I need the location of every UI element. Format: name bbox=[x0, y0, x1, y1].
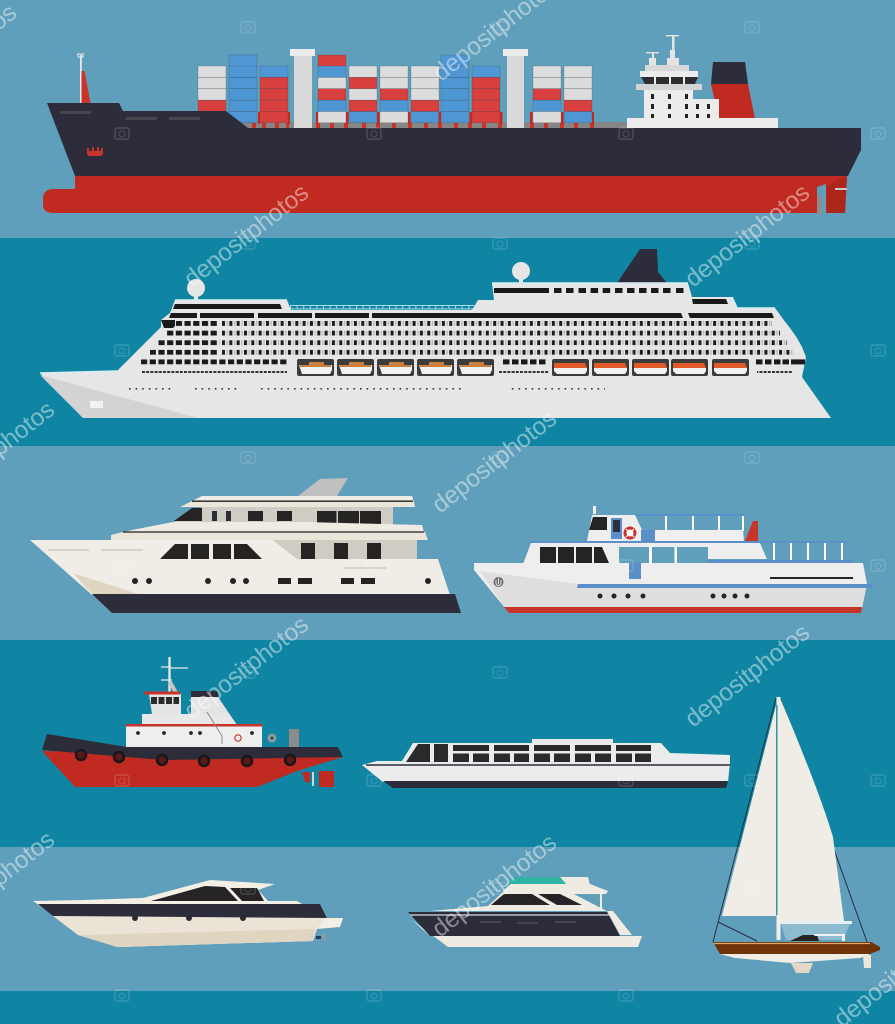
upper cabin bbox=[587, 515, 744, 541]
upper railing bbox=[290, 305, 474, 310]
hull upper bbox=[33, 880, 343, 947]
lower cabin bbox=[273, 540, 417, 559]
rudder and propeller bbox=[302, 771, 334, 787]
main cabin bbox=[126, 726, 262, 748]
hull highlight bbox=[40, 283, 775, 373]
saloon windows bbox=[540, 547, 609, 563]
container ship bbox=[43, 35, 861, 214]
stern bbox=[607, 911, 632, 935]
windows bbox=[491, 894, 582, 905]
upper deck rail bbox=[635, 514, 745, 531]
navy body bbox=[408, 912, 620, 936]
main sail bbox=[780, 698, 844, 921]
mast bbox=[161, 657, 188, 693]
open deck bbox=[613, 547, 677, 564]
sailboat bbox=[713, 697, 880, 973]
crane pillars bbox=[290, 49, 528, 128]
cockpit windows bbox=[151, 886, 264, 901]
orange lifeboats bbox=[552, 359, 749, 376]
radar domes bbox=[187, 262, 530, 301]
brown hull bbox=[713, 942, 880, 954]
saloon windows bbox=[160, 544, 262, 559]
cabin fittings bbox=[136, 731, 254, 741]
container frame posts bbox=[258, 112, 594, 124]
rudder bbox=[863, 955, 871, 968]
white hull bbox=[40, 283, 831, 418]
radar arch bbox=[298, 478, 348, 496]
dodger bbox=[781, 924, 850, 940]
life ring bbox=[625, 528, 635, 538]
waterline stripe bbox=[366, 764, 730, 766]
porthole dots bbox=[129, 388, 605, 390]
superstructure bbox=[627, 35, 778, 128]
lower shade bbox=[78, 929, 315, 947]
fender dots bbox=[132, 915, 246, 921]
ladder bbox=[207, 712, 222, 744]
passenger ferry bbox=[474, 506, 872, 613]
emblem bbox=[494, 577, 504, 587]
white underbody bbox=[720, 954, 870, 963]
blue door bbox=[611, 518, 622, 539]
flybridge rear bbox=[560, 877, 590, 885]
roof bbox=[532, 739, 613, 744]
hull lines bbox=[48, 550, 386, 568]
hull vents bbox=[480, 922, 576, 923]
bow mast bbox=[77, 54, 90, 103]
blue box bbox=[641, 530, 655, 541]
deck lashing band bbox=[228, 122, 628, 128]
funnel bbox=[617, 249, 667, 283]
funnel housing bbox=[191, 697, 237, 725]
navy stripe bbox=[38, 904, 327, 918]
flybridge roof bbox=[503, 884, 608, 894]
upper cabin windows bbox=[174, 508, 381, 525]
funnel bbox=[711, 62, 755, 119]
winch and bollard bbox=[268, 729, 299, 747]
container stacks bbox=[198, 55, 592, 123]
windows bbox=[406, 744, 651, 762]
support post bbox=[600, 894, 602, 910]
crown emblem bbox=[87, 147, 103, 156]
ferry hull bbox=[474, 563, 867, 608]
main hull bbox=[30, 540, 450, 595]
rigging bbox=[713, 698, 867, 942]
navy keel bbox=[383, 781, 728, 788]
mid-ship and stern windows bbox=[503, 359, 805, 364]
portholes bbox=[598, 594, 750, 598]
black trim bbox=[770, 577, 853, 579]
rear railing bbox=[773, 543, 843, 563]
depositphotos watermarks: depositphotos bbox=[427, 405, 562, 519]
lower cabin windows bbox=[301, 543, 381, 559]
jib sail bbox=[722, 705, 776, 916]
depositphotos watermarks: depositphotos bbox=[179, 611, 314, 725]
cabin windows bbox=[141, 321, 793, 373]
motor cruiser bbox=[33, 880, 343, 947]
hull stripe bbox=[714, 942, 870, 944]
tyre fenders bbox=[76, 750, 295, 766]
roof rail bbox=[530, 541, 848, 543]
upper cabin bbox=[174, 507, 393, 526]
luxury yacht bbox=[30, 478, 461, 613]
mid deck bbox=[142, 714, 237, 725]
portholes bbox=[132, 578, 431, 584]
top deck windows bbox=[554, 288, 684, 293]
main deck cabin bbox=[523, 543, 767, 564]
white lifeboats bbox=[297, 359, 494, 376]
rudder bbox=[817, 176, 847, 214]
red fin bbox=[745, 521, 758, 541]
flybridge yacht bbox=[408, 877, 642, 947]
navy gunwale bbox=[42, 734, 343, 760]
mast bbox=[776, 697, 780, 940]
red waterline bbox=[504, 607, 862, 613]
mast bbox=[593, 506, 596, 514]
cruise ship bbox=[40, 249, 831, 418]
bow shade bbox=[40, 375, 198, 418]
cream body bbox=[53, 916, 327, 947]
depositphotos watermarks: depositphotos bbox=[427, 829, 562, 943]
cabin and hull bbox=[362, 743, 730, 782]
red lower hull bbox=[43, 176, 847, 213]
wheelhouse window bbox=[589, 517, 607, 530]
lower hull bbox=[412, 920, 642, 947]
navy waterline bbox=[92, 594, 461, 613]
anchor mark bbox=[90, 401, 103, 408]
propeller bbox=[316, 934, 326, 941]
red hull bbox=[42, 751, 343, 787]
cabin roof stripe bbox=[126, 724, 262, 726]
cabin bbox=[430, 892, 607, 911]
hull shade bbox=[480, 571, 867, 608]
blue stripe bbox=[577, 584, 872, 588]
tugboat bbox=[42, 657, 343, 787]
door step bbox=[629, 563, 641, 579]
hull stripe bbox=[410, 914, 609, 916]
depositphotos watermarks: depositphotos bbox=[179, 179, 314, 293]
keel bbox=[791, 963, 813, 973]
hull strips bbox=[60, 111, 200, 120]
boom bbox=[780, 921, 852, 924]
top decks bbox=[180, 496, 415, 507]
bow shade bbox=[73, 573, 138, 594]
depositphotos watermarks: depositphotos bbox=[680, 179, 815, 293]
wheelhouse bbox=[144, 692, 181, 714]
teal bimini bbox=[507, 877, 567, 884]
funnel cap bbox=[191, 691, 218, 697]
depositphotos watermarks: depositphotos bbox=[680, 619, 815, 733]
dark hull bbox=[47, 103, 861, 176]
mid deck bbox=[111, 522, 428, 540]
cockpit bbox=[790, 934, 845, 941]
river bus bbox=[362, 739, 730, 788]
black bands bbox=[161, 288, 774, 328]
